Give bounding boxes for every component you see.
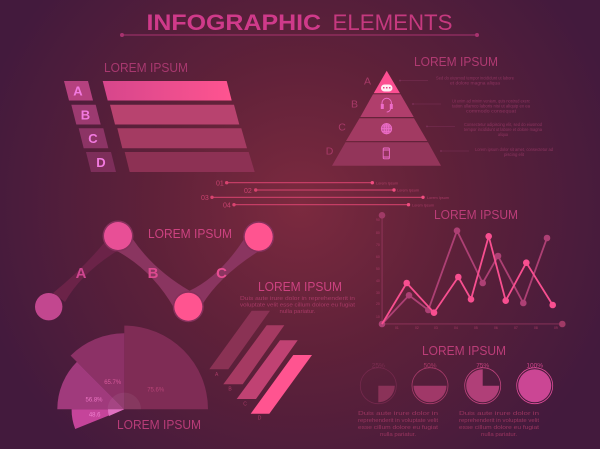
axis labels: 05 — [474, 326, 478, 330]
connector C — [189, 236, 259, 305]
tabs A to D: C — [88, 131, 98, 146]
title: ELEMENTS — [332, 10, 452, 35]
text block: right: esse cillum dolore eu fugiat — [459, 425, 540, 431]
sector 65.7% — [71, 333, 124, 409]
axis labels: 80 — [376, 231, 380, 235]
pyramid layers — [332, 71, 441, 166]
stripe labels: B — [228, 386, 232, 392]
heading: fan: LOREM IPSUM — [117, 417, 201, 432]
fan labels: 65.7% — [104, 380, 122, 386]
text block: left: nulla pariatur. — [380, 432, 416, 438]
circle: B node — [102, 220, 134, 252]
text block: left: Duis aute irure dolor in — [358, 411, 438, 417]
text block: right: Duis aute irure dolor in — [459, 411, 539, 417]
text block: centre note: Duis aute irure dolor in reprehenderit in — [240, 296, 355, 302]
pyramid text notes: piscing elit — [504, 152, 525, 157]
stripe labels: C — [243, 402, 247, 408]
tabs A to D: A — [73, 84, 83, 98]
timeline row 01: Lorem Ipsum — [376, 180, 399, 185]
tabs A to D: D — [96, 155, 106, 170]
gauge 50% — [412, 362, 448, 404]
pyramid letters: C — [338, 122, 346, 134]
sector 75.6% — [124, 326, 208, 409]
text block: left: reprehenderit in voluptate velit — [358, 418, 439, 424]
heading: pyramid: LOREM IPSUM — [414, 54, 498, 69]
timeline row 02: Lorem Ipsum — [397, 188, 420, 193]
tabs A to D: B — [81, 108, 90, 122]
heading: line chart: LOREM IPSUM — [434, 207, 518, 222]
pyramid text notes: commodo consequat — [466, 108, 517, 114]
timeline row 03: 03 — [201, 195, 209, 202]
connector B — [117, 238, 190, 308]
axis labels: 90 — [376, 218, 380, 222]
icon: globe — [381, 124, 392, 134]
timeline row 02: 02 — [244, 188, 252, 195]
text block: right: nulla pariatur. — [481, 432, 517, 438]
connector A — [53, 243, 117, 302]
pyramid letters: D — [326, 146, 334, 158]
heading: percentages: LOREM IPSUM — [422, 343, 506, 358]
data series: dim — [379, 227, 550, 327]
text block: right — [459, 411, 540, 438]
pyramid text notes: Consectetur adipiscing elit, sed do eiusmod — [464, 122, 543, 127]
axis labels: 07 — [514, 326, 518, 330]
pyramid text notes: tempor incididunt ut labore et dolore magna — [464, 127, 543, 132]
panel: numbered timeline lines — [201, 180, 450, 210]
letters A B C: B — [148, 265, 159, 282]
axis labels: 50 — [376, 267, 380, 271]
pyramid text notes: Ut enim ad minim veniam, quis nostrud exerc — [452, 98, 530, 104]
axis labels: 06 — [494, 326, 498, 330]
fan labels: 75.6% — [147, 388, 165, 394]
icon: smartphone — [383, 148, 389, 159]
timeline row 03 — [201, 195, 450, 202]
text block: centre note: nulla pariatur. — [280, 309, 316, 315]
pyramid text notes: Sed do eiusmod tempor incididunt ut labore — [436, 76, 515, 80]
gauge 100% — [517, 362, 553, 404]
pyramid text notes: Lorem ipsum dolor sit amet, consectetur ad — [475, 147, 554, 152]
panel: fan chart — [57, 326, 208, 432]
text block: centre note: voluptate velit esse cillum dolore eu fugiat — [240, 302, 356, 308]
text block: left: esse cillum dolore eu fugiat — [358, 425, 439, 431]
text block: centre note: LOREM IPSUM — [258, 279, 342, 294]
panel: stacked bars list — [64, 60, 255, 172]
axis labels: 03 — [434, 326, 438, 330]
axis labels: 08 — [534, 326, 538, 330]
timeline row 03: Lorem Ipsum — [427, 195, 450, 200]
timeline row 04: 04 — [223, 202, 231, 210]
gauge 25% — [360, 362, 396, 404]
sector 56.8% — [57, 362, 124, 409]
gauge 50%: 50% — [423, 362, 437, 370]
circle: A node — [35, 293, 62, 320]
panel: connected circles — [35, 220, 274, 322]
timeline row 04 — [223, 202, 435, 210]
data series: bright — [382, 233, 556, 324]
sector 48.6 — [72, 409, 124, 429]
axis labels: 20 — [376, 302, 380, 306]
pyramid text notes: tation ullamco laboris nisi ut aliquip ex ea — [452, 104, 531, 108]
bars A to D — [103, 81, 255, 172]
axis labels: 02 — [415, 326, 419, 330]
axis labels: 60 — [376, 255, 380, 259]
axis labels: 30 — [376, 291, 380, 295]
stripe labels: A — [215, 372, 219, 378]
panel: percentage circles — [358, 343, 553, 438]
centre overlay — [108, 393, 141, 409]
pyramid text notes: aliqua — [498, 132, 509, 137]
axis labels: 10 — [376, 315, 380, 319]
tabs A to D — [64, 81, 116, 172]
timeline row 01 — [216, 180, 399, 188]
timeline row 04: Lorem Ipsum — [412, 202, 435, 207]
pyramid text notes: et dolore magna aliqua — [450, 80, 501, 86]
title underline — [120, 33, 479, 37]
panel: line chart — [376, 207, 566, 330]
letters A B C: C — [216, 265, 227, 282]
title — [146, 10, 452, 35]
gauge 25%: 25% — [372, 362, 385, 370]
axis labels: 40 — [376, 279, 380, 283]
gauge 100%: 100% — [526, 362, 543, 370]
centre tip — [108, 409, 124, 416]
icon: speech bubble — [381, 84, 392, 92]
pyramid letters — [326, 76, 371, 158]
pyramid letters: B — [351, 98, 358, 110]
stripe labels — [215, 372, 262, 422]
panel: pyramid — [326, 54, 554, 166]
axis labels: 70 — [376, 243, 380, 247]
panel: diagonal stripes — [209, 311, 312, 422]
text block: centre note — [240, 279, 356, 315]
circle: C node — [173, 291, 204, 322]
axis labels — [376, 218, 558, 330]
letters A B C — [76, 265, 227, 282]
icon: headset — [381, 98, 392, 112]
fan labels: 48.6 — [89, 412, 101, 418]
timeline row 01: 01 — [216, 180, 224, 188]
heading: circles: LOREM IPSUM — [148, 226, 232, 241]
pyramid arrows — [399, 80, 469, 152]
heading: bars: LOREM IPSUM — [104, 60, 188, 75]
text block: left — [358, 411, 439, 438]
text block: right: reprehenderit in voluptate velit — [459, 418, 540, 424]
axis labels: 04 — [454, 326, 458, 330]
axis labels: 09 — [554, 326, 558, 330]
gauge 75% — [465, 362, 501, 404]
letters A B C: A — [76, 265, 87, 282]
fan labels: 56.8% — [85, 398, 103, 404]
timeline row 02 — [244, 188, 420, 195]
stripe labels: D — [258, 416, 262, 422]
circle: D node — [243, 221, 274, 252]
chart axes — [379, 212, 566, 327]
title: INFOGRAPHIC — [146, 10, 321, 35]
pyramid text notes — [436, 76, 554, 157]
axis labels: 01 — [395, 326, 399, 330]
fan labels — [85, 380, 165, 418]
pyramid letters: A — [364, 76, 371, 88]
gauge 75%: 75% — [476, 362, 489, 370]
